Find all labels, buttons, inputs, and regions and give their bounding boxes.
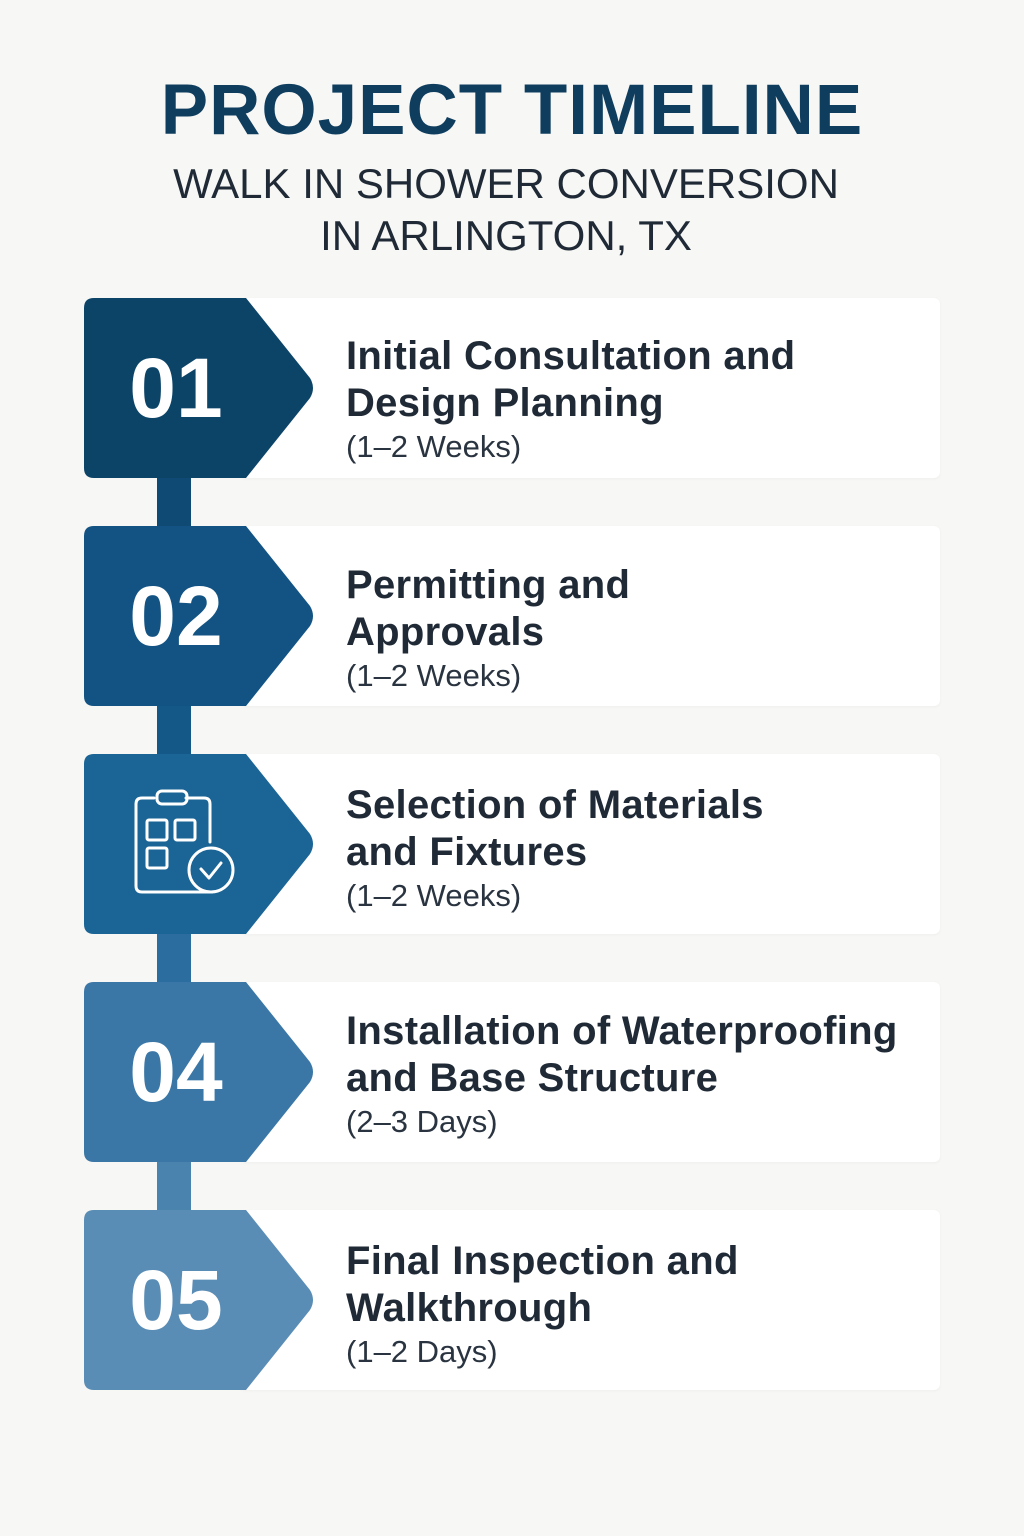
text 2: Permitting and bbox=[346, 563, 630, 607]
connector 1-2 bbox=[157, 470, 191, 530]
step 2 bbox=[84, 526, 940, 706]
number 02: 02 bbox=[129, 569, 223, 663]
step 1 bbox=[84, 298, 940, 478]
connector 4-5 bbox=[157, 1154, 191, 1214]
text 4: Installation of Waterproofing bbox=[346, 1009, 898, 1053]
number 04: 04 bbox=[129, 1025, 223, 1119]
text 1 bbox=[346, 334, 795, 464]
text 5 bbox=[346, 1239, 739, 1369]
step 4 bbox=[84, 982, 940, 1162]
badge 4 bbox=[84, 982, 313, 1162]
text 3: Selection of Materials bbox=[346, 783, 764, 827]
text 3: and Fixtures bbox=[346, 830, 587, 874]
subtitle: IN ARLINGTON, TX bbox=[320, 212, 692, 259]
badge 3 bbox=[84, 754, 313, 934]
text 3: (1–2 Weeks) bbox=[346, 878, 521, 913]
text 5: Final Inspection and bbox=[346, 1239, 739, 1283]
text 5: Walkthrough bbox=[346, 1286, 592, 1330]
text 2: (1–2 Weeks) bbox=[346, 658, 521, 693]
number 01: 01 bbox=[129, 341, 223, 435]
title: PROJECT TIMELINE bbox=[161, 71, 863, 150]
text 1: Initial Consultation and bbox=[346, 334, 795, 378]
badge 2 bbox=[84, 526, 313, 706]
text 1: (1–2 Weeks) bbox=[346, 429, 521, 464]
text 4: and Base Structure bbox=[346, 1056, 718, 1100]
step 3 bbox=[84, 754, 940, 934]
step 5 bbox=[84, 1210, 940, 1390]
connector 2-3 bbox=[157, 698, 191, 758]
text 5: (1–2 Days) bbox=[346, 1334, 498, 1369]
text 2 bbox=[346, 563, 630, 693]
card 2 bbox=[240, 526, 940, 706]
icon: clipboard checklist bbox=[136, 791, 233, 892]
subtitle: WALK IN SHOWER CONVERSION bbox=[173, 160, 839, 207]
card 3 bbox=[240, 754, 940, 934]
badge 1 bbox=[84, 298, 313, 478]
number 05: 05 bbox=[129, 1253, 223, 1347]
text 4: (2–3 Days) bbox=[346, 1104, 498, 1139]
badge 5 bbox=[84, 1210, 313, 1390]
text 3 bbox=[346, 783, 764, 913]
subtitle bbox=[173, 160, 839, 259]
connector 3-4 bbox=[157, 926, 191, 986]
card 1 bbox=[240, 298, 940, 478]
text 2: Approvals bbox=[346, 610, 544, 654]
text 1: Design Planning bbox=[346, 381, 664, 425]
text 4 bbox=[346, 1009, 898, 1139]
card 4 bbox=[240, 982, 940, 1162]
card 5 bbox=[240, 1210, 940, 1390]
